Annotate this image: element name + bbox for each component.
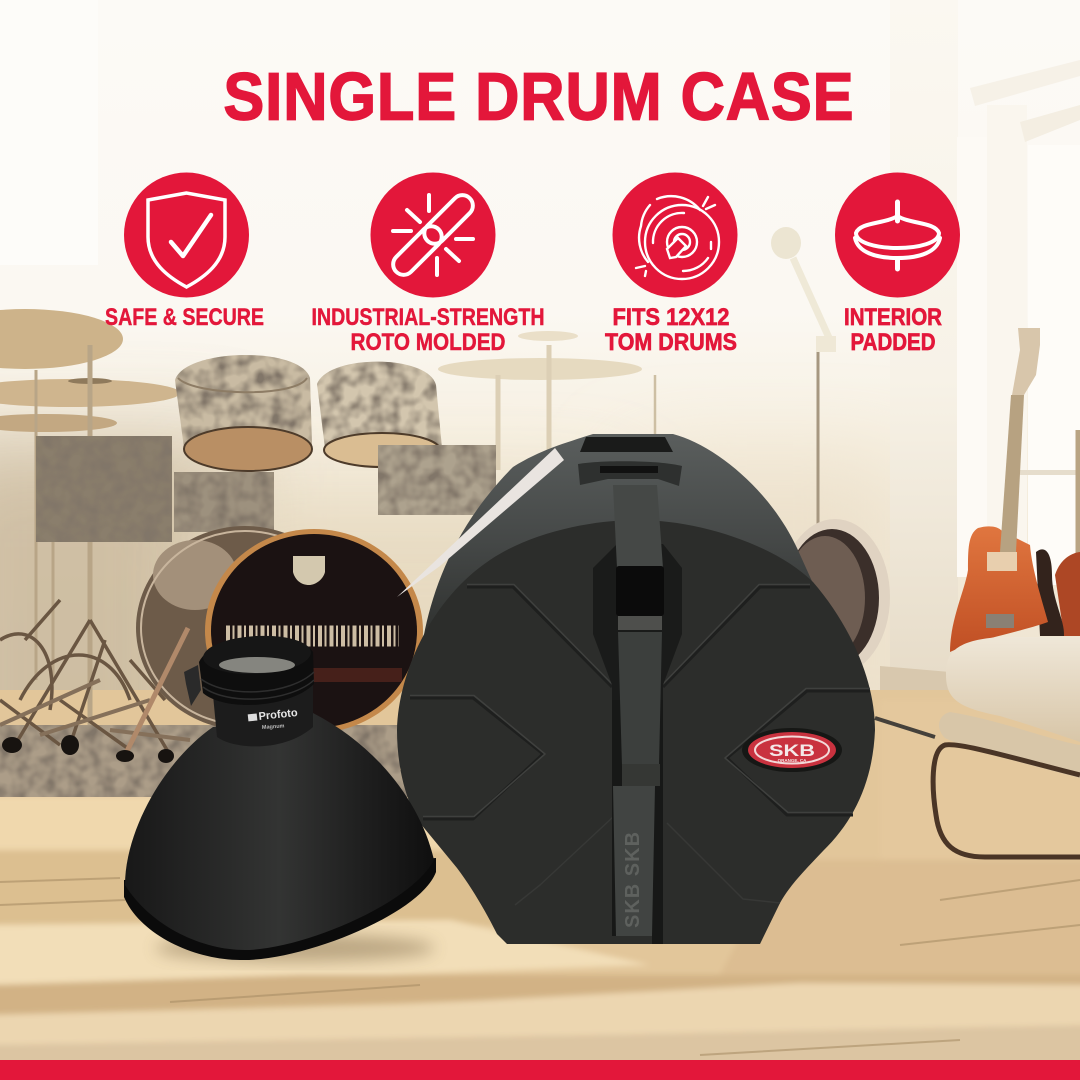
collar xyxy=(184,633,314,706)
rack tom left xyxy=(175,355,312,472)
bass drum shell xyxy=(136,526,354,730)
Profoto label: Magnum xyxy=(262,723,285,731)
SKB badge: SKB xyxy=(769,741,815,760)
background: microphone stand xyxy=(771,227,836,575)
icon: hi-hat xyxy=(835,172,960,298)
carry handle xyxy=(578,437,682,486)
label: FITS 12X12 xyxy=(612,304,730,330)
icon: cymbals xyxy=(612,172,738,298)
feature: interior padded: PADDED xyxy=(850,329,936,355)
product: reflector dome xyxy=(124,633,436,962)
case embossed panels xyxy=(410,584,870,905)
cymbals xyxy=(0,309,642,432)
label: INDUSTRIAL-STRENGTH xyxy=(312,304,544,330)
stands xyxy=(36,345,655,725)
background: guitars xyxy=(950,328,1080,652)
feature: industrial strength xyxy=(312,172,544,355)
floor tom mid xyxy=(174,472,274,532)
rear guitar body xyxy=(1055,552,1080,636)
feature: fits tom drums: TOM DRUMS xyxy=(605,329,737,355)
feature: fits tom drums xyxy=(605,172,738,355)
SKB badge xyxy=(742,728,842,772)
background: sofa chair xyxy=(933,637,1080,857)
title: SINGLE DRUM CASE xyxy=(224,59,854,134)
floor hardware xyxy=(0,600,190,755)
icon: chain link xyxy=(370,172,496,298)
label: SAFE & SECURE xyxy=(105,304,264,330)
feature: safe and secure xyxy=(105,172,264,330)
label: INTERIOR xyxy=(844,304,942,330)
Profoto label: Profoto xyxy=(258,707,298,723)
feature: interior padded xyxy=(835,172,960,355)
background: wooden floor xyxy=(0,690,1080,1065)
guitar neck xyxy=(1000,395,1024,552)
strap lettering: SKB SKB xyxy=(622,831,644,928)
dome body xyxy=(125,713,434,950)
rear guitar neck xyxy=(1076,430,1080,560)
bass drum head xyxy=(205,529,423,733)
dark guitar xyxy=(1036,549,1064,636)
hanging white tag xyxy=(397,448,564,597)
feature: industrial strength: ROTO MOLDED xyxy=(350,329,506,355)
bass drum spur xyxy=(125,628,188,755)
tripod feet xyxy=(2,735,174,763)
case rear shell xyxy=(423,434,825,650)
case centre seam xyxy=(612,700,663,944)
case front face xyxy=(397,520,875,944)
icon: shield xyxy=(124,172,249,298)
guitar head xyxy=(1012,328,1040,395)
webbing strap xyxy=(613,485,663,936)
rug xyxy=(0,725,470,797)
background: drum kit xyxy=(0,309,655,797)
bridge xyxy=(987,552,1017,571)
rack tom right xyxy=(317,362,442,468)
case dark latch plate xyxy=(593,544,682,720)
floor tom left xyxy=(36,436,172,542)
Profoto label xyxy=(248,707,298,731)
background: room wall xyxy=(0,0,1080,840)
product: drum case xyxy=(397,434,875,944)
bottom red bar xyxy=(0,1060,1080,1080)
background: right floor drum xyxy=(780,519,935,737)
neck xyxy=(213,680,313,746)
dome rim xyxy=(124,858,436,960)
orange guitar body xyxy=(950,526,1048,652)
contact shadow xyxy=(155,934,435,962)
SKB badge: ORANGE, CA xyxy=(778,758,807,763)
buckle xyxy=(616,566,664,630)
floor tom right xyxy=(378,445,496,515)
